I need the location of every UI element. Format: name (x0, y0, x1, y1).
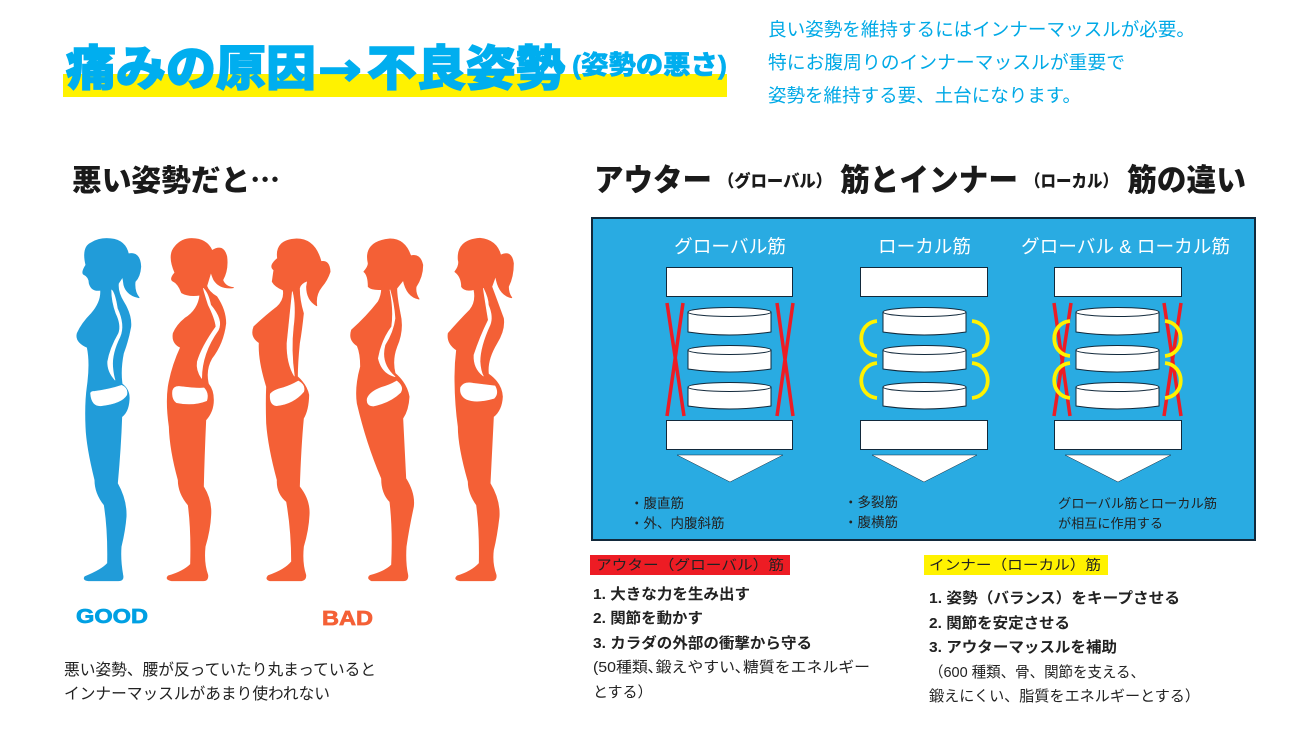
title: 不良姿勢 (367, 43, 565, 96)
posture silhouettes (77, 238, 513, 581)
column: local muscles: ・多裂筋 (844, 494, 898, 510)
intro text: 姿勢を維持する要、土台になります。 (768, 85, 1081, 106)
note about bad posture (64, 661, 376, 703)
silhouette: good posture (77, 239, 141, 581)
label: good: GOOD (76, 606, 148, 628)
title: → (318, 42, 362, 96)
outer muscle list (593, 585, 870, 701)
title: 痛みの原因 (66, 43, 316, 96)
inner muscle list: （600 種類、骨、関節を支える、 (929, 664, 1145, 681)
intro text: 特にお腹周りのインナーマッスルが重要で (768, 52, 1125, 73)
silhouette: bad posture 1 (167, 239, 233, 581)
column: global muscles: ・腹直筋 (630, 495, 684, 511)
heading: outer and inner muscle difference: アウター (594, 163, 712, 198)
inner muscle list (929, 589, 1200, 705)
column: local muscles: ローカル筋 (878, 236, 971, 257)
silhouette: bad posture 2 (253, 239, 330, 581)
intro text (768, 19, 1195, 106)
inner muscle list: 1. 姿勢（バランス）をキープさせる (929, 589, 1180, 607)
inner muscle list: 3. アウターマッスルを補助 (929, 638, 1117, 656)
column: global and local muscles: グローバル筋とローカル筋 (1058, 496, 1217, 511)
column: global muscles (630, 236, 793, 531)
inner muscle label (924, 555, 1108, 575)
outer muscle list: とする） (593, 684, 653, 701)
inner muscle label: インナー（ローカル）筋 (929, 557, 1101, 573)
outer muscle list: 1. 大きな力を生み出す (593, 585, 750, 603)
outer muscle label: アウター（グローバル）筋 (596, 557, 784, 573)
column: global muscles: グローバル筋 (674, 236, 786, 257)
column: local muscles (844, 236, 988, 530)
heading: outer and inner muscle difference: 筋の違い (1127, 163, 1246, 198)
column: global muscles: ・外、内腹斜筋 (630, 515, 724, 531)
silhouette: bad posture 3 (351, 239, 423, 581)
heading: outer and inner muscle difference: （ローカル） (1025, 172, 1118, 191)
silhouette: bad posture 4 (448, 238, 513, 581)
heading: outer and inner muscle difference (594, 163, 1246, 198)
heading: bad posture: 悪い姿勢だと… (72, 156, 280, 200)
outer muscle label (590, 555, 790, 575)
outer muscle list: (50種類､鍛えやすい､糖質をエネルギー (593, 658, 870, 676)
column: global and local muscles: が相互に作用する (1058, 516, 1163, 531)
panel: muscle diagram (592, 218, 1255, 540)
title: (姿勢の悪さ) (572, 50, 727, 80)
heading: outer and inner muscle difference: （グローバル） (718, 171, 832, 191)
column: global and local muscles (1021, 236, 1230, 531)
column: global and local muscles: グローバル & ローカル筋 (1021, 236, 1230, 257)
column: local muscles: ・腹横筋 (844, 514, 898, 530)
outer muscle list: 3. カラダの外部の衝撃から守る (593, 634, 812, 652)
inner muscle list: 鍛えにくい、脂質をエネルギーとする） (929, 687, 1200, 705)
note about bad posture: インナーマッスルがあまり使われない (64, 685, 330, 703)
outer muscle list: 2. 関節を動かす (593, 609, 703, 627)
note about bad posture: 悪い姿勢、腰が反っていたり丸まっていると (64, 661, 376, 679)
title (63, 42, 727, 97)
intro text: 良い姿勢を維持するにはインナーマッスルが必要。 (768, 19, 1195, 40)
heading: outer and inner muscle difference: 筋とインナー (840, 163, 1018, 198)
inner muscle list: 2. 関節を安定させる (929, 614, 1070, 632)
label: bad: BAD (322, 608, 373, 630)
